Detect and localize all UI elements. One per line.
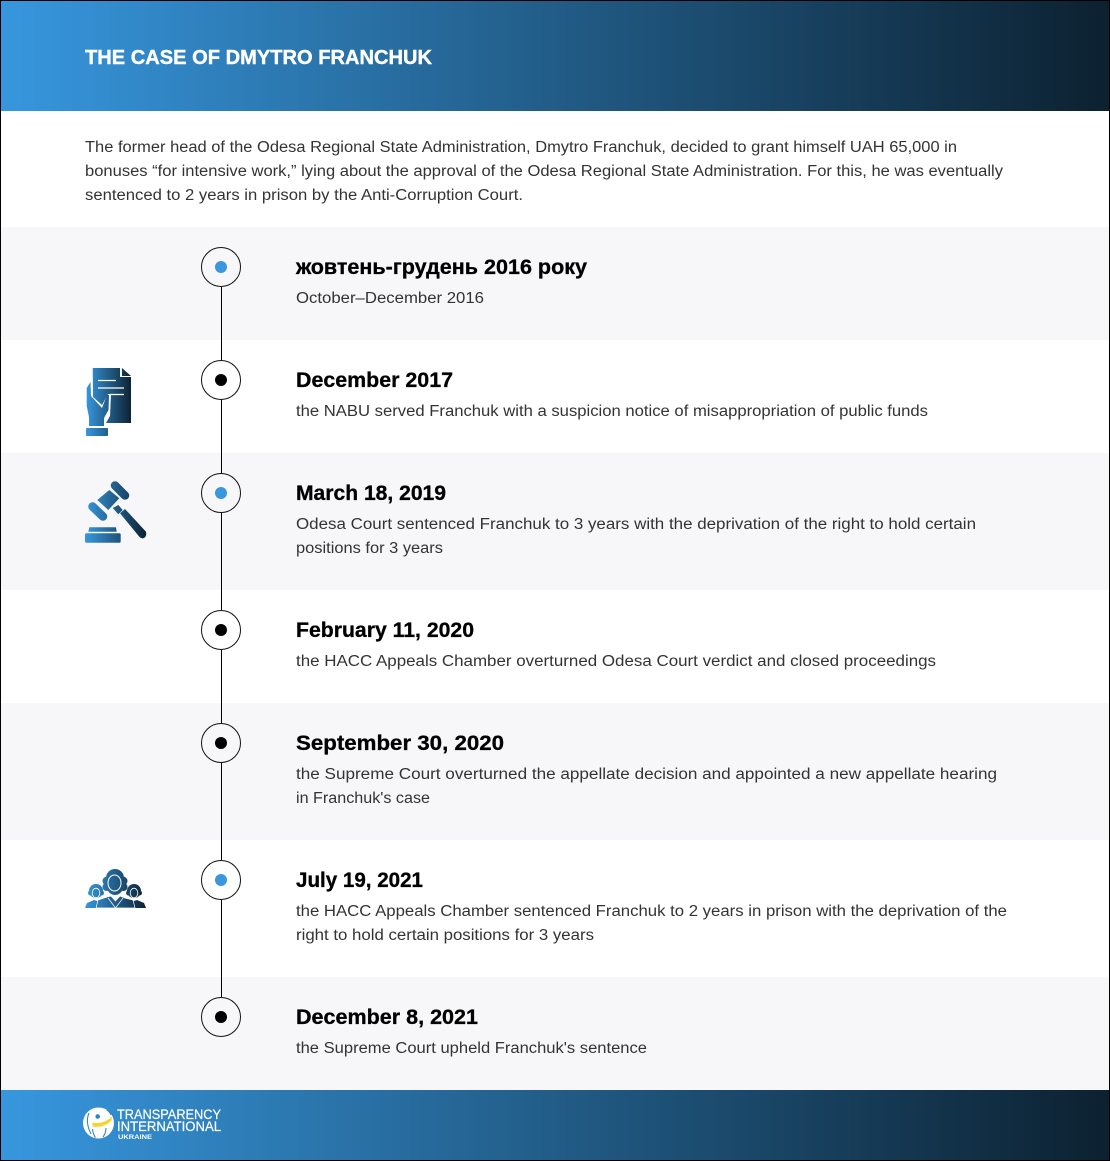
intro text: sentenced to 2 years in prison by the Anti-Corruption Court. xyxy=(85,187,523,204)
footer band xyxy=(0,1090,1110,1161)
timeline entry: July 19, 2021: right to hold certain positions for 3 years xyxy=(296,927,594,944)
title: THE CASE OF DMYTRO FRANCHUK xyxy=(85,46,432,69)
logo: Transparency International Ukraine xyxy=(83,1107,221,1141)
timeline entry: July 19, 2021: July 19, 2021 xyxy=(296,869,423,892)
timeline entry: July 19, 2021: the HACC Appeals Chamber sentenced Franchuk to 2 years in prison with the deprivation of the xyxy=(296,903,1007,920)
intro text: bonuses “for intensive work,” lying about the approval of the Odesa Regional State Administration. For this, he was eventually xyxy=(85,163,1003,180)
timeline entry: October–December 2016: жовтень-грудень 2016 року xyxy=(295,256,587,279)
timeline entry: March 18, 2019: Odesa Court sentenced Franchuk to 3 years with the deprivation of the right to hold certain xyxy=(296,516,976,533)
timeline entry: September 30, 2020 xyxy=(202,724,997,807)
timeline entry: December 8, 2021: December 8, 2021 xyxy=(296,1006,478,1029)
timeline entry: December 8, 2021 xyxy=(202,998,647,1057)
timeline entry: December 8, 2021: the Supreme Court upheld Franchuk's sentence xyxy=(296,1040,647,1057)
logo: Transparency International Ukraine: INTERNATIONAL xyxy=(117,1119,221,1134)
timeline entry: March 18, 2019: positions for 3 years xyxy=(296,540,443,557)
timeline entry: October–December 2016: October–December 2016 xyxy=(296,290,484,307)
timeline entry: December 2017: December 2017 xyxy=(296,369,453,392)
timeline entry: September 30, 2020: September 30, 2020 xyxy=(296,732,504,755)
header band xyxy=(0,0,1110,111)
timeline entry: December 2017: the NABU served Franchuk with a suspicion notice of misappropriation of public funds xyxy=(296,403,928,420)
timeline entry: September 30, 2020: in Franchuk's case xyxy=(296,790,430,807)
icon: group of three judges xyxy=(85,869,146,908)
intro text xyxy=(85,139,1003,204)
timeline row backgrounds xyxy=(0,227,1110,1090)
logo: Transparency International Ukraine: TRANSPARENCY xyxy=(117,1107,221,1122)
timeline entry: October–December 2016 xyxy=(202,248,587,307)
icon: hand holding document xyxy=(86,368,131,436)
intro text: The former head of the Odesa Regional State Administration, Dmytro Franchuk, decided to grant himself UAH 65,000 in xyxy=(85,139,957,156)
timeline entry: February 11, 2020: February 11, 2020 xyxy=(296,619,474,642)
timeline entry: February 11, 2020: the HACC Appeals Chamber overturned Odesa Court verdict and closed proceedings xyxy=(296,653,936,670)
icon: judge gavel xyxy=(85,486,146,543)
timeline entry: March 18, 2019 xyxy=(202,474,976,557)
timeline entry: December 2017 xyxy=(202,360,928,420)
timeline entry: July 19, 2021 xyxy=(202,860,1007,944)
timeline entry: September 30, 2020: the Supreme Court overturned the appellate decision and appointed a new appellate hearing xyxy=(296,766,997,783)
logo: Transparency International Ukraine: UKRAINE xyxy=(118,1134,153,1141)
timeline axis line xyxy=(220,287,222,997)
timeline entry: February 11, 2020 xyxy=(202,610,936,670)
timeline entry: March 18, 2019: March 18, 2019 xyxy=(296,482,446,505)
